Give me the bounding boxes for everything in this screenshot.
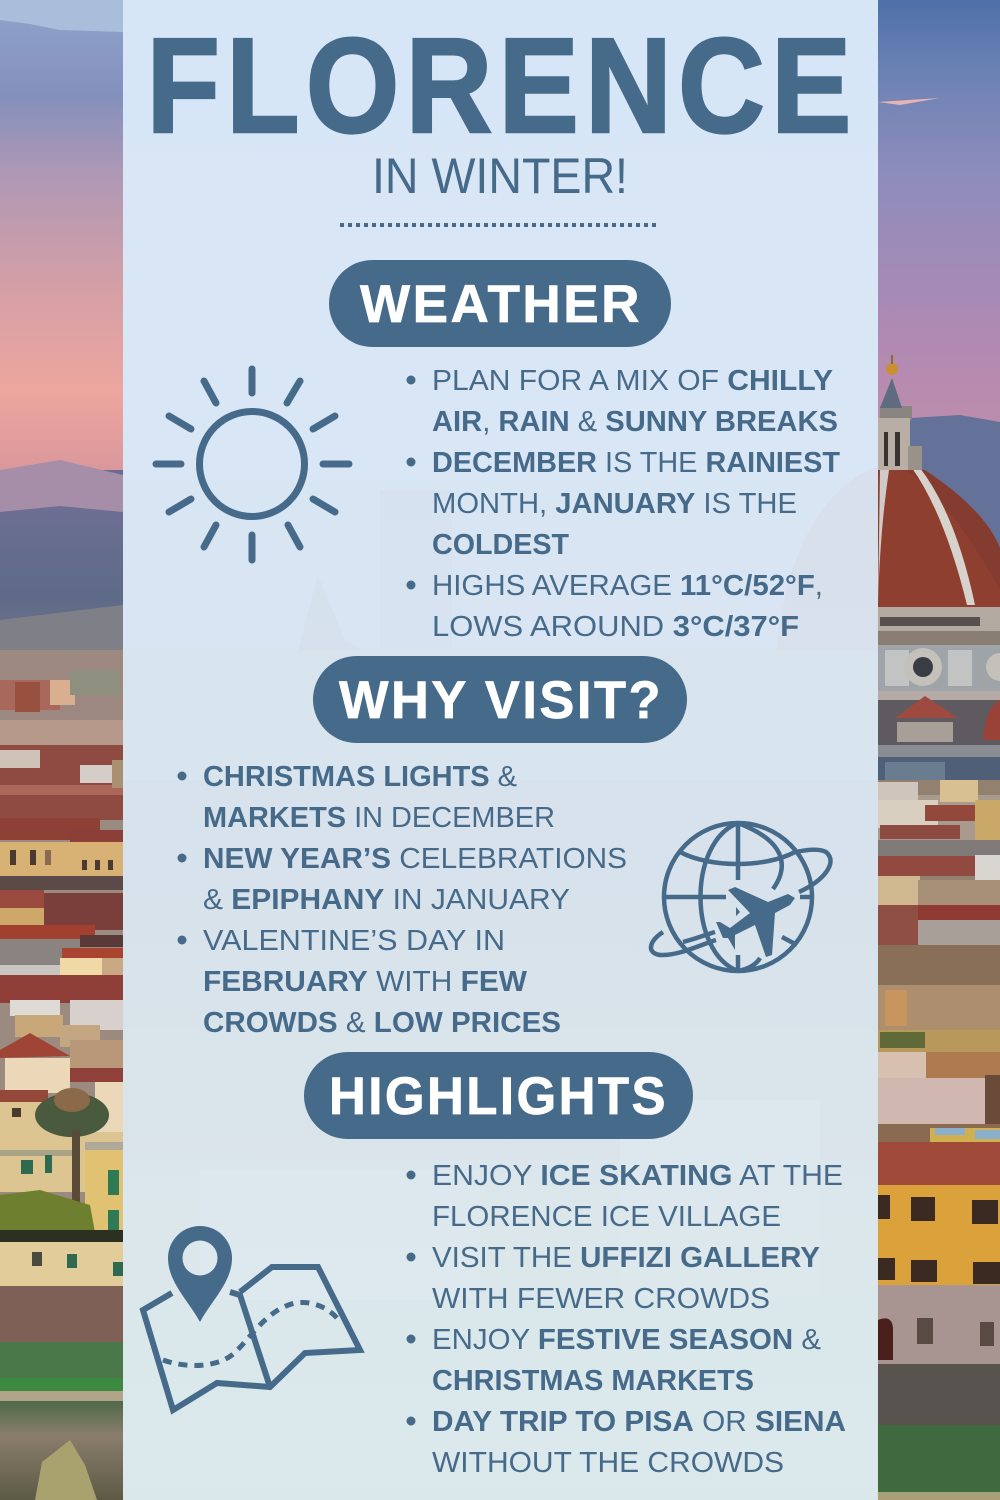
highlights bullet list bbox=[406, 1160, 846, 1479]
highlights bullet list: DAY TRIP TO PISA OR SIENA bbox=[432, 1406, 846, 1438]
why visit bullet list: FEBRUARY WITH FEW bbox=[203, 966, 528, 998]
highlights bullet list: VISIT THE UFFIZI GALLERY bbox=[432, 1242, 820, 1274]
weather bullet list: DECEMBER IS THE RAINIEST bbox=[432, 447, 840, 479]
dome and cathedral bbox=[878, 468, 1000, 800]
icon: globe with plane bbox=[651, 823, 831, 971]
dotted divider bbox=[340, 223, 656, 227]
highlights bullet list: ENJOY ICE SKATING AT THE bbox=[432, 1160, 843, 1192]
highlights bullet list: WITH FEWER CROWDS bbox=[432, 1283, 770, 1315]
weather bullet list: COLDEST bbox=[432, 529, 569, 561]
panel: highlights bbox=[143, 1052, 846, 1479]
title: FLORENCE bbox=[146, 10, 858, 161]
heading: weather: WEATHER bbox=[360, 275, 642, 334]
why visit bullet list: CROWDS & LOW PRICES bbox=[203, 1007, 561, 1039]
highlights bullet list: ENJOY FESTIVE SEASON & bbox=[432, 1324, 821, 1356]
heading: why visit bbox=[313, 656, 687, 743]
highlights bullet list: CHRISTMAS MARKETS bbox=[432, 1365, 754, 1397]
heading: highlights bbox=[304, 1052, 693, 1139]
why visit bullet list bbox=[178, 761, 627, 1039]
panel: why visit bbox=[178, 656, 831, 1039]
why visit bullet list: MARKETS IN DECEMBER bbox=[203, 802, 555, 834]
plane bbox=[716, 887, 795, 957]
why visit bullet list: NEW YEAR’S CELEBRATIONS bbox=[203, 843, 627, 875]
sky bbox=[0, 0, 1000, 480]
heading: highlights: HIGHLIGHTS bbox=[329, 1067, 668, 1126]
heading: weather bbox=[329, 260, 671, 347]
panel: weather bbox=[156, 260, 840, 643]
weather bullet list bbox=[406, 365, 840, 643]
weather bullet list: LOWS AROUND 3°C/37°F bbox=[432, 611, 799, 643]
right city bbox=[877, 780, 1000, 1500]
weather bullet list: AIR, RAIN & SUNNY BREAKS bbox=[432, 406, 838, 438]
translucent centre panel bbox=[123, 0, 878, 1500]
left city bbox=[0, 650, 123, 1290]
icon: sun bbox=[156, 369, 349, 560]
why visit bullet list: & EPIPHANY IN JANUARY bbox=[203, 884, 570, 916]
palm tree bbox=[35, 1088, 109, 1202]
highlights bullet list: FLORENCE ICE VILLAGE bbox=[432, 1201, 781, 1233]
why visit bullet list: VALENTINE’S DAY IN bbox=[203, 925, 505, 957]
ghost scenery behind the panel bbox=[123, 0, 880, 1500]
highlights bullet list: WITHOUT THE CROWDS bbox=[432, 1447, 784, 1479]
weather bullet list: PLAN FOR A MIX OF CHILLY bbox=[432, 365, 833, 397]
weather bullet list: MONTH, JANUARY IS THE bbox=[432, 488, 797, 520]
left riverside: building, hedge, wall, river bbox=[0, 1142, 123, 1500]
dome lantern bbox=[878, 355, 922, 470]
subtitle: IN WINTER! bbox=[372, 148, 628, 204]
why visit bullet list: CHRISTMAS LIGHTS & bbox=[203, 761, 517, 793]
distant hills bbox=[0, 415, 1000, 660]
icon: map with pin bbox=[143, 1226, 360, 1410]
weather bullet list: HIGHS AVERAGE 11°C/52°F, bbox=[432, 570, 823, 602]
heading: why visit: WHY VISIT? bbox=[339, 671, 663, 730]
